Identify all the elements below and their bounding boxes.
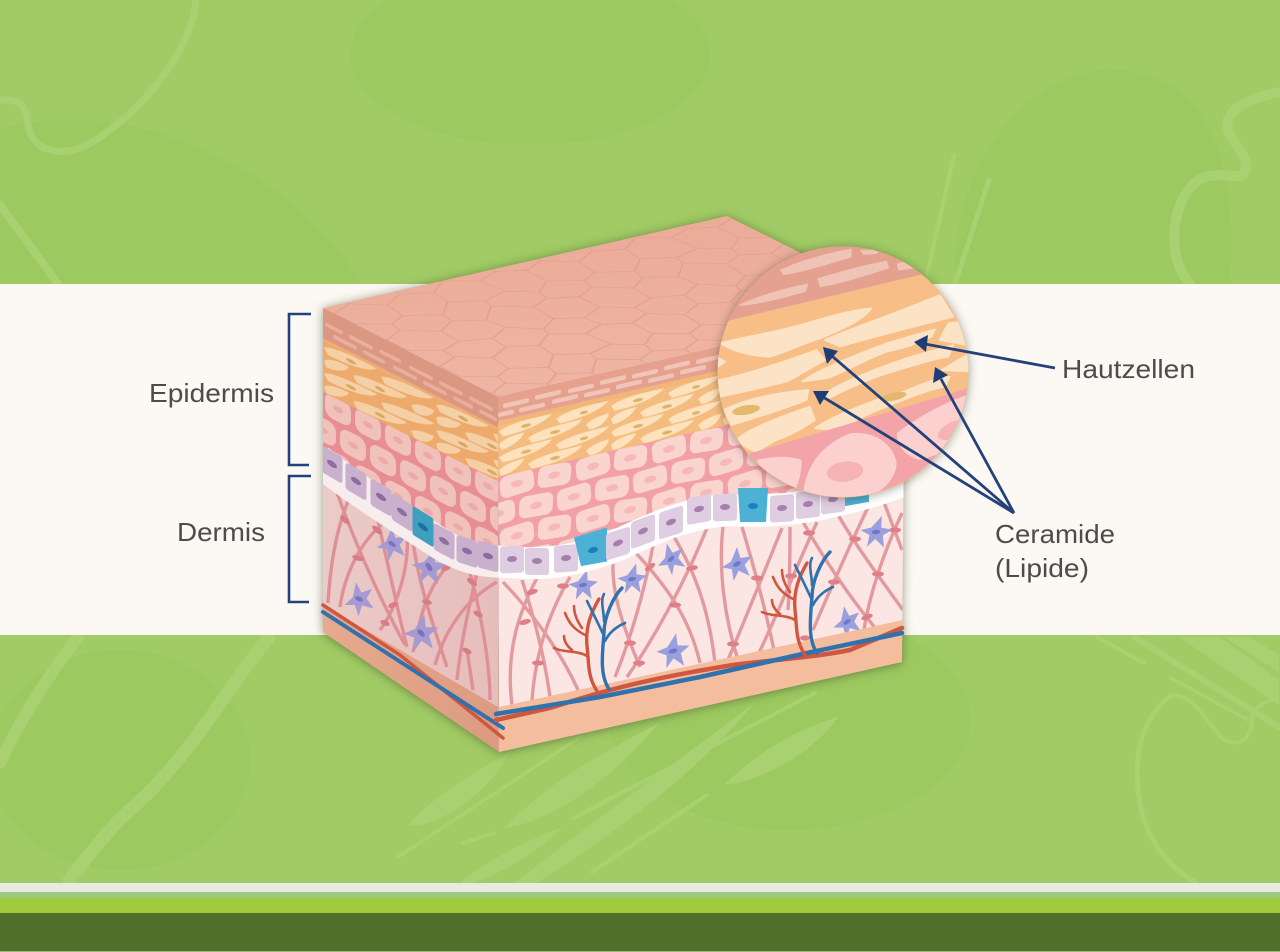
label: Hautzellen: Hautzellen xyxy=(1062,354,1195,384)
blood vessels xyxy=(323,605,902,738)
arrow: Ceramide to lipid 3 xyxy=(813,391,1014,513)
arrow: Hautzellen xyxy=(914,335,1055,368)
right yellow cell layer xyxy=(496,346,729,477)
arrow: Ceramide to lipid 2 xyxy=(823,347,1014,513)
basal cells right xyxy=(500,488,869,576)
label: Dermis: Dermis xyxy=(177,517,265,547)
top surface xyxy=(323,216,905,397)
label: Ceramide (Lipide) xyxy=(995,519,1115,583)
basal membrane xyxy=(318,445,910,575)
left fibroblast stars xyxy=(344,530,446,651)
basal cells left xyxy=(322,445,498,573)
label: Ceramide (Lipide): Ceramide xyxy=(995,519,1115,549)
left tan base xyxy=(323,605,499,752)
right pink cell layer xyxy=(498,424,802,548)
bracket: dermis xyxy=(289,476,311,602)
right fibroblast stars xyxy=(565,511,895,671)
left yellow cell layer xyxy=(323,308,499,482)
right tan base xyxy=(499,620,903,752)
left capillary tree xyxy=(554,588,625,691)
footer stripes xyxy=(0,883,1280,952)
right dermis xyxy=(498,480,910,752)
left dermis xyxy=(316,483,499,752)
right face xyxy=(498,304,908,752)
right collagen fibres xyxy=(503,497,903,705)
magnifier circle xyxy=(703,230,973,503)
right stratum corneum xyxy=(496,346,720,421)
label: Epidermis: Epidermis xyxy=(149,378,274,408)
left collagen fibres xyxy=(328,487,497,700)
magnified pink layer xyxy=(750,387,973,503)
arrow: Ceramide to lipid 1 xyxy=(933,367,1014,513)
left pink cell layer xyxy=(323,388,498,566)
right capillary tree xyxy=(762,552,833,655)
bracket: epidermis xyxy=(289,314,311,465)
left face xyxy=(323,308,499,752)
magnified nuclei xyxy=(732,392,906,416)
label: Ceramide (Lipide): (Lipide) xyxy=(995,553,1089,583)
left stratum corneum xyxy=(323,308,499,428)
cream band xyxy=(0,284,1280,635)
magnified stratum corneum xyxy=(729,246,922,320)
skin block xyxy=(318,216,910,752)
magnified cream skin cells xyxy=(717,295,970,452)
